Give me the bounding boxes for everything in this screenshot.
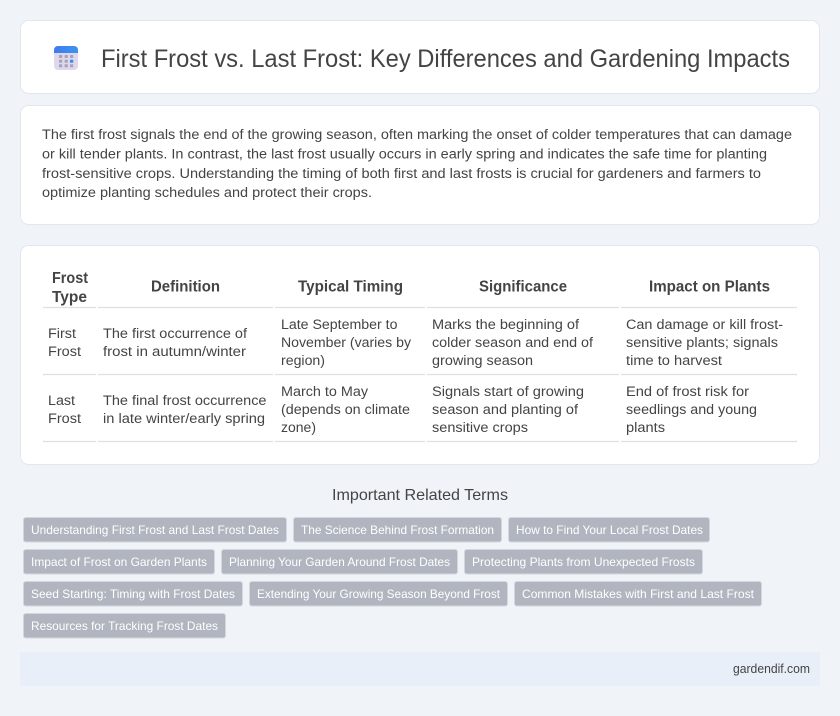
table row: first frost: Late September to xyxy=(281,317,398,333)
table header row: Significance xyxy=(479,278,567,296)
tag: understanding dates xyxy=(24,518,286,542)
tag: extending: Extending Your Growing Season Beyond Frost xyxy=(257,587,501,601)
footer site name: gardendif.com xyxy=(733,662,810,676)
tag: impact xyxy=(24,550,214,574)
table header row: Frost xyxy=(52,270,88,287)
icon: calendar xyxy=(54,46,78,70)
tag: impact: Impact of Frost on Garden Plants xyxy=(31,555,207,569)
table row: last frost: season and planting of xyxy=(432,402,578,418)
intro text block: optimize planting schedules and protect their crops. xyxy=(42,185,372,201)
table header row xyxy=(52,270,770,306)
table row: first frost: region) xyxy=(281,353,325,369)
panel: introduction xyxy=(20,106,820,224)
tag: seed starting: Seed Starting: Timing with Frost Dates xyxy=(31,587,235,601)
table row: first frost: First xyxy=(48,326,76,342)
table row: last frost: Signals start of growing xyxy=(432,384,584,400)
table rules xyxy=(43,308,797,442)
table header row: Definition xyxy=(151,278,220,296)
table row: last frost: zone) xyxy=(281,420,316,436)
table header row: Type xyxy=(52,289,87,306)
tag: resources: Resources for Tracking Frost Dates xyxy=(31,619,218,633)
panel: comparison table xyxy=(20,246,820,464)
tag: resources xyxy=(24,614,226,638)
table row: first frost: sensitive plants; signals xyxy=(626,335,778,351)
tag: seed starting xyxy=(24,582,242,606)
table row: last frost: End of frost risk for xyxy=(626,384,749,400)
footer xyxy=(20,652,820,686)
tag: science: The Science Behind Frost Formation xyxy=(301,523,494,537)
tag: mistakes xyxy=(514,582,762,606)
table row: first frost: The first occurrence of xyxy=(103,326,247,342)
tag: local dates: How to Find Your Local Frost Dates xyxy=(516,523,703,537)
table row: last frost: Frost xyxy=(48,411,81,427)
panel: title header xyxy=(20,20,820,94)
panel: related terms xyxy=(24,487,762,638)
tag: mistakes: Common Mistakes with First and Last Frost xyxy=(522,587,755,601)
table row: last frost: plants xyxy=(626,420,665,436)
tag: science xyxy=(294,518,502,542)
table row: last frost: (depends on climate xyxy=(281,402,410,418)
tag: planning xyxy=(222,550,458,574)
intro text block xyxy=(42,127,792,201)
tag: extending xyxy=(250,582,508,606)
table row: last frost: The final frost occurrence xyxy=(103,393,267,409)
table row: first frost: Frost xyxy=(48,344,81,360)
intro text block: frost-sensitive crops. Understanding the timing of both first and last frosts is crucial for gardeners and farmers to xyxy=(42,166,761,182)
table row: first frost: time to harvest xyxy=(626,353,722,369)
table row: last frost: March to May xyxy=(281,384,369,400)
related terms heading: Important Related Terms xyxy=(332,487,508,504)
intro text block: The first frost signals the end of the growing season, often marking the onset of colder temperatures that can damage xyxy=(42,127,792,143)
tag: understanding dates: Understanding First Frost and Last Frost Dates xyxy=(31,523,279,537)
table row: first frost: Marks the beginning of xyxy=(432,317,579,333)
tag: protecting xyxy=(464,550,702,574)
tag: planning: Planning Your Garden Around Frost Dates xyxy=(229,555,450,569)
table row: first frost: Can damage or kill frost- xyxy=(626,317,783,333)
table row: last frost: in late winter/early spring xyxy=(103,411,265,427)
table row: first frost: frost in autumn/winter xyxy=(103,344,246,360)
tag: local dates xyxy=(508,518,710,542)
table row: last frost: seedlings and young xyxy=(626,402,757,418)
intro text block: or kill tender plants. In contrast, the last frost usually occurs in early spring and indicates the safe time for planting xyxy=(42,146,767,162)
tag: protecting: Protecting Plants from Unexpected Frosts xyxy=(472,555,695,569)
table row: first frost xyxy=(48,317,783,369)
table row: first frost: November (varies by xyxy=(281,335,412,351)
table row: first frost: growing season xyxy=(432,353,533,369)
title: First Frost vs. Last Frost: Key Differences and Gardening Impacts xyxy=(101,45,790,73)
table row: first frost: colder season and end of xyxy=(432,335,593,351)
table row: last frost: sensitive crops xyxy=(432,420,528,436)
table row: last frost xyxy=(48,384,757,436)
table row: last frost: Last xyxy=(48,393,75,409)
table header row: Typical Timing xyxy=(298,278,403,296)
table header row: Impact on Plants xyxy=(649,278,770,296)
